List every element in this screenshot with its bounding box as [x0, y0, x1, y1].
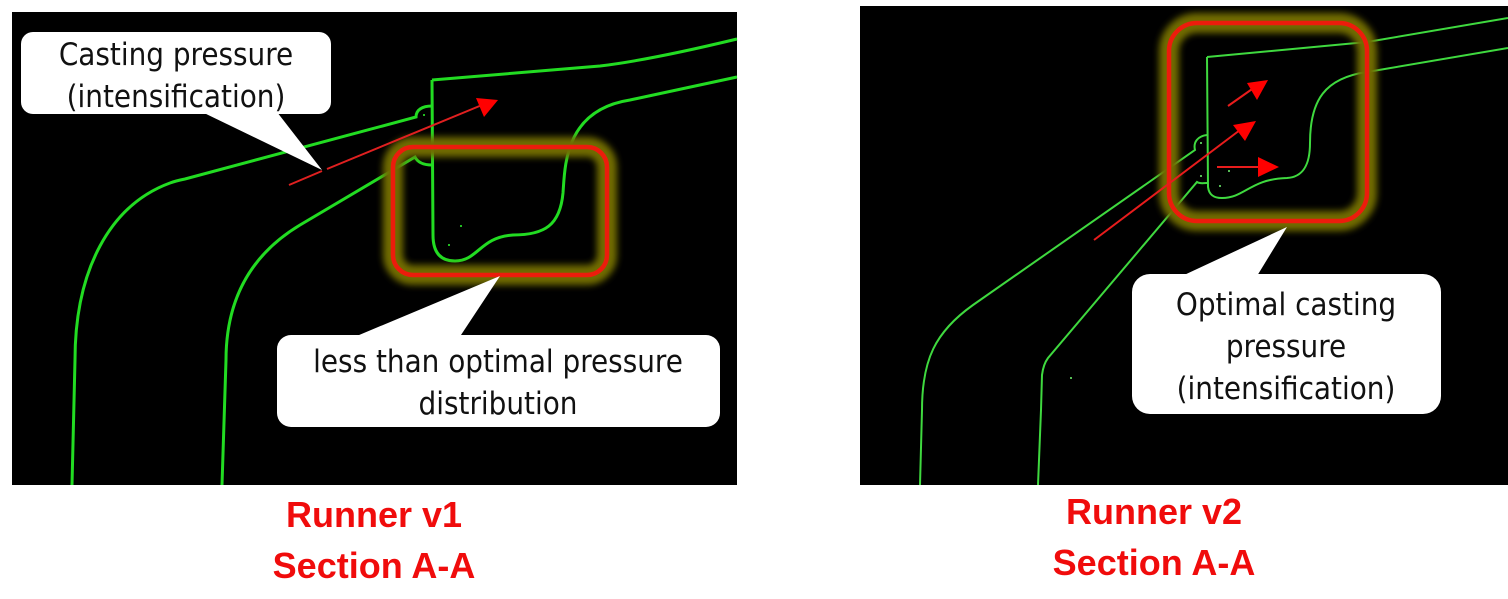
runner outline v1: [72, 39, 737, 485]
runner outline v2: [920, 18, 1508, 485]
callout: less than optimal: [277, 276, 720, 427]
callout: less than optimal: less than optimal pressure: [313, 344, 683, 380]
panel: Runner v1 section view: [12, 12, 737, 485]
callout: optimal pressure: pressure: [1226, 329, 1346, 365]
specks: [423, 114, 462, 246]
title: Section A-A right: Section A-A: [1053, 542, 1255, 583]
title: Runner v2: Runner v2: [1066, 491, 1242, 532]
title: Runner v1: Runner v1: [286, 494, 462, 535]
highlight box: optimal zone: [1169, 23, 1367, 221]
arrows: pressure directions: [1094, 80, 1279, 240]
callout: optimal pressure: [1132, 227, 1441, 414]
callout: optimal pressure: (intensification): [1177, 371, 1395, 407]
callout: optimal pressure: Optimal casting: [1176, 287, 1396, 323]
callout: casting pressure: (intensification): [67, 79, 285, 115]
callout: casting pressure: [21, 32, 331, 170]
panel: Runner v2 section view: [860, 6, 1508, 485]
callout: casting pressure: Casting pressure: [59, 37, 293, 73]
highlight box: pressure zone: [393, 147, 607, 275]
title: Section A-A left: Section A-A: [273, 545, 475, 586]
specks: [1070, 142, 1230, 379]
callout: less than optimal: distribution: [419, 386, 577, 422]
arrow: casting pressure: [289, 98, 498, 185]
